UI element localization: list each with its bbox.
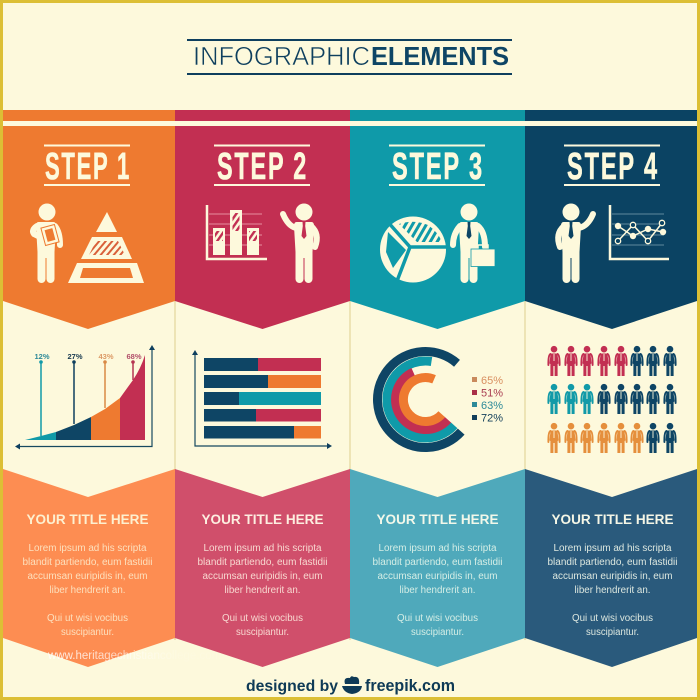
panel body text: accumsan euripidis in, eum: [28, 571, 148, 582]
icon: pie chart: [380, 216, 448, 282]
panel title: YOUR TITLE HERE: [552, 512, 674, 527]
panel body text: Qui ut wisi vocibus: [222, 613, 303, 624]
panel body text: liber hendrerit an.: [400, 585, 476, 596]
panel body text: blandit partiendo, eum fastidii: [198, 557, 328, 568]
panel body text: suscipiantur.: [61, 627, 114, 638]
legend: [472, 375, 503, 424]
panel body text: [548, 543, 678, 638]
icon: presenter with raised arm: [283, 204, 317, 283]
icon: pyramid: [68, 212, 144, 283]
chart: area curve with percentage pins: 68%: [126, 352, 142, 361]
panel body text: Lorem ipsum ad his scripta: [28, 543, 147, 554]
footer credit: designed by: [246, 678, 338, 695]
step 3 heading: STEP 3: [392, 144, 484, 187]
panel title: YOUR TITLE HERE: [202, 512, 324, 527]
panel body text: liber hendrerit an.: [224, 585, 300, 596]
panel body text: suscipiantur.: [236, 627, 289, 638]
icon: freepik ship: [342, 676, 362, 694]
panel: step 3: [350, 110, 525, 329]
panel: text block 1: [3, 469, 175, 667]
title: INFOGRAPHIC: [193, 43, 370, 71]
footer credit: freepik.com: [365, 676, 455, 695]
panel body text: blandit partiendo, eum fastidii: [548, 557, 678, 568]
panel: step 2: [175, 110, 350, 329]
legend: 51%: [481, 388, 503, 400]
panel body text: blandit partiendo, eum fastidii: [22, 557, 152, 568]
footer credit: [246, 676, 455, 695]
panel body text: [198, 543, 328, 638]
panel: text block 3: [350, 469, 525, 667]
step 1 heading: STEP 1: [45, 145, 131, 188]
panel body text: liber hendrerit an.: [574, 585, 650, 596]
chart: area curve with percentage pins: 12%: [34, 352, 50, 361]
icon: person with tablet: [33, 204, 60, 283]
icon: line chart: [610, 205, 669, 259]
title: [187, 39, 512, 75]
legend: 63%: [481, 400, 503, 412]
step 4 heading: STEP 4: [567, 144, 659, 187]
chart: area curve with percentage pins: 27%: [67, 352, 83, 361]
title: ELEMENTS: [371, 43, 509, 71]
panel: text block 4: [525, 469, 697, 667]
panel body text: [22, 543, 152, 638]
panel: text block 2: [175, 469, 350, 667]
panel body text: suscipiantur.: [411, 627, 464, 638]
panel body text: suscipiantur.: [586, 627, 639, 638]
chart: radial rings with legend: [377, 352, 503, 448]
panel body text: Lorem ipsum ad his scripta: [204, 543, 322, 554]
panel title: YOUR TITLE HERE: [376, 512, 498, 527]
legend: 72%: [481, 412, 503, 424]
panel body text: Qui ut wisi vocibus: [397, 613, 478, 624]
panel body text: [372, 543, 502, 638]
panel body text: Qui ut wisi vocibus: [572, 613, 653, 624]
column divider lines: [175, 300, 525, 640]
panel body text: Qui ut wisi vocibus: [47, 613, 128, 624]
panel: step 4: [525, 110, 697, 329]
panel title: YOUR TITLE HERE: [26, 512, 148, 527]
panel body text: blandit partiendo, eum fastidii: [372, 557, 502, 568]
panel body text: Lorem ipsum ad his scripta: [554, 543, 672, 554]
panel: step 1: [3, 110, 175, 329]
chart: stacked horizontal bars: [192, 350, 332, 449]
chart: area curve with percentage pins: 43%: [98, 352, 114, 361]
chart: people pictogram: [548, 346, 676, 453]
icon: bar chart: [207, 205, 267, 259]
panel body text: liber hendrerit an.: [50, 585, 126, 596]
watermark text: www.heritagechristiancollege.com: [47, 650, 221, 662]
step 2 heading: STEP 2: [217, 144, 308, 187]
panel body text: accumsan euripidis in, eum: [202, 571, 322, 582]
panel body text: accumsan euripidis in, eum: [378, 571, 498, 582]
legend: 65%: [481, 375, 503, 387]
icon: person with briefcase: [453, 204, 495, 283]
panel body text: Lorem ipsum ad his scripta: [378, 543, 497, 554]
icon: presenter with raised arm: [558, 204, 593, 283]
panel body text: accumsan euripidis in, eum: [552, 571, 672, 582]
chart: area curve with percentage pins: [15, 345, 155, 450]
